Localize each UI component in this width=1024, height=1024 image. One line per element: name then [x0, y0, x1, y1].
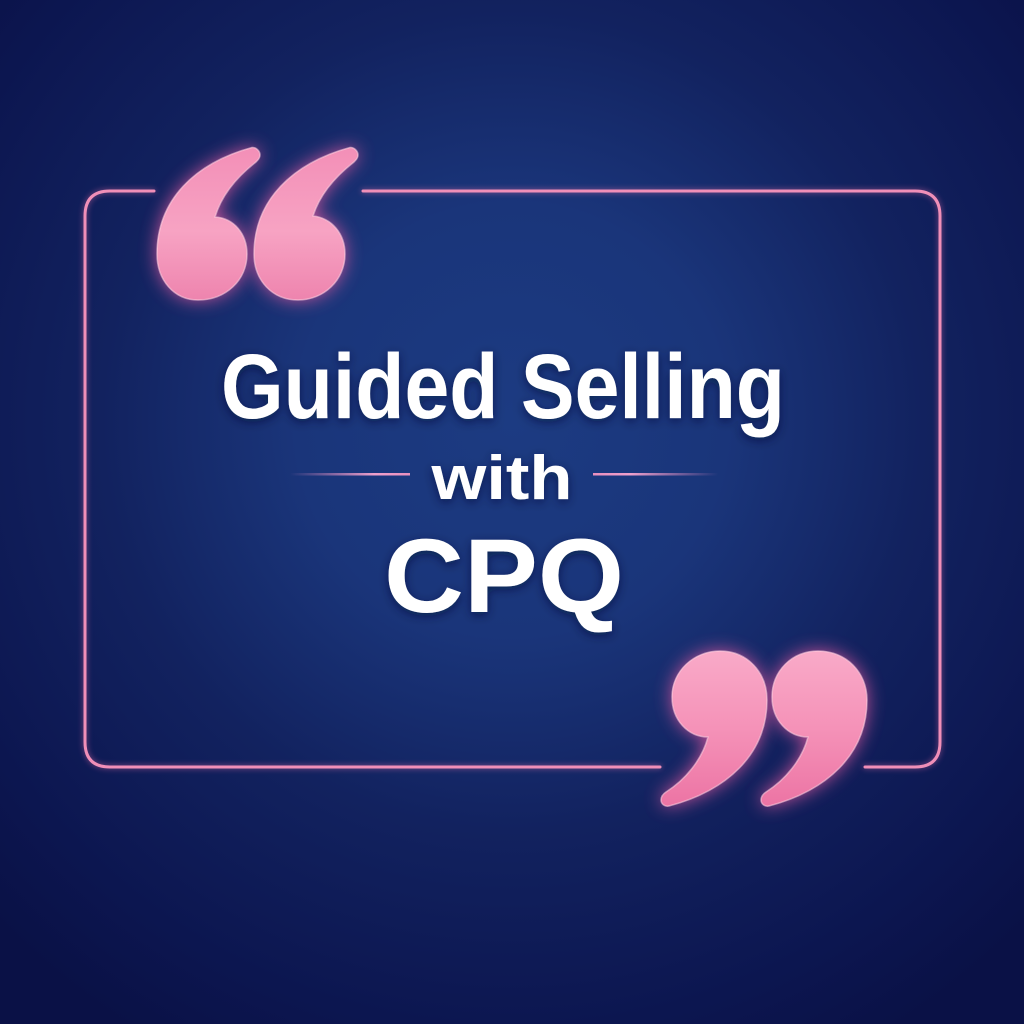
title: Guided Selling: Guided Selling [221, 336, 785, 438]
icon: closing quotation mark [661, 651, 867, 806]
left divider rule [290, 473, 410, 476]
right divider rule [593, 473, 718, 476]
title: with: with [430, 444, 572, 513]
title: CPQ: CPQ [384, 518, 624, 635]
neon frame [85, 191, 940, 767]
icon: opening quotation mark [157, 147, 358, 300]
